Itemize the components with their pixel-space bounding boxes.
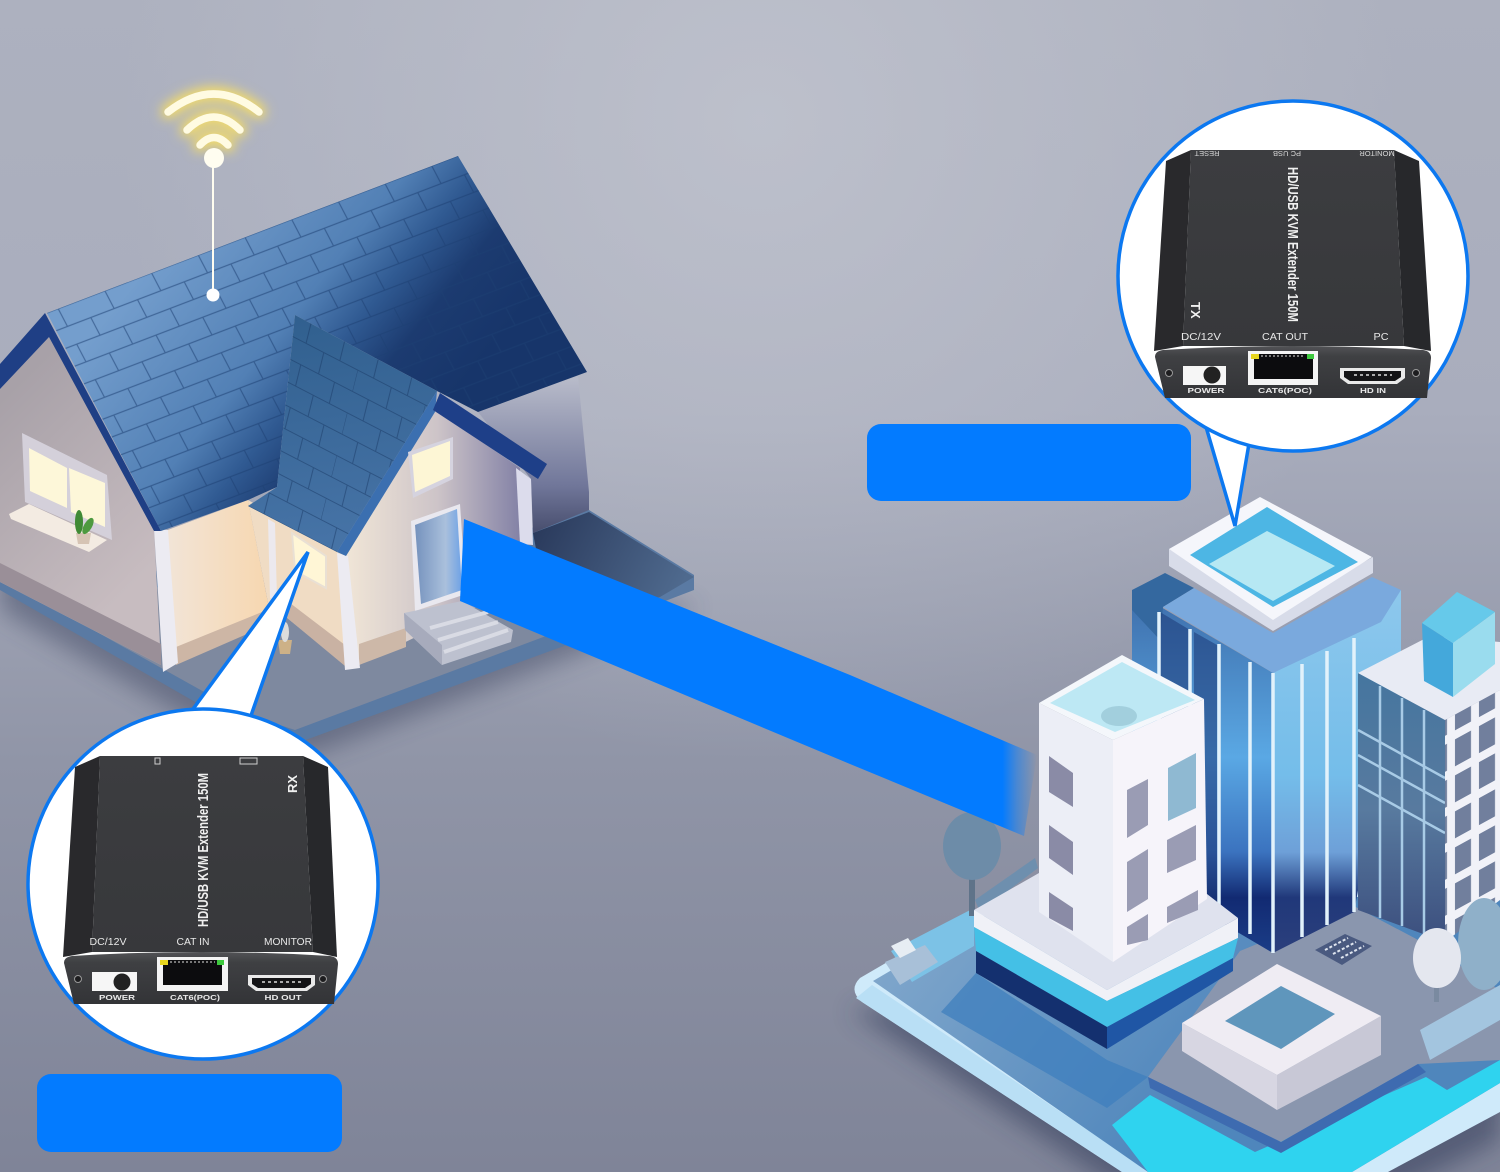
tower roof pool (1190, 507, 1358, 607)
roof inset (1050, 662, 1195, 732)
RX labels: CAT6(POC) (170, 993, 221, 1002)
RX screws (74, 976, 326, 982)
platform outer (854, 880, 1500, 1172)
blank label: office (867, 424, 1191, 501)
window sill (9, 504, 107, 552)
slab edge (0, 510, 694, 742)
blank label: home (37, 1074, 342, 1152)
gable corner post (337, 553, 360, 670)
podium cyan band (974, 927, 1238, 1027)
left bench (885, 938, 938, 985)
steps (404, 601, 513, 665)
platform inner (873, 890, 1500, 1172)
tower left top dark (1132, 573, 1194, 640)
left plinth (0, 563, 161, 665)
pavilion sides (1182, 1016, 1381, 1110)
wifi dot (204, 148, 224, 168)
TX labels: POWER (1188, 386, 1225, 395)
front plinth (176, 612, 286, 665)
TX labels: PC (1374, 332, 1388, 343)
roof disc (1101, 706, 1137, 726)
tower roof side (1169, 549, 1373, 631)
right glass building (1358, 673, 1445, 942)
wifi glow (168, 94, 259, 145)
plaza dark edge (1148, 1064, 1426, 1153)
side pad (533, 512, 694, 612)
RX labels (90, 937, 312, 1002)
RX tag: RX (285, 775, 300, 793)
RX labels: MONITOR (264, 937, 312, 948)
RX right side (303, 756, 337, 957)
antenna base (206, 288, 220, 302)
right plinth (359, 628, 406, 665)
RX title: HD/USB KVM Extender 150M (195, 773, 212, 927)
TX lens circle (1118, 101, 1468, 451)
TX labels: HD IN (1360, 386, 1386, 395)
white building left face (1039, 703, 1113, 962)
white building roof (1039, 655, 1204, 740)
office building illustration (850, 497, 1500, 1172)
TX top labels: MONITOR (1359, 149, 1395, 158)
TX left side (1154, 150, 1191, 351)
blue tree right (1458, 898, 1500, 990)
reflection pool under podium (941, 973, 1148, 1108)
rooftop cube (1422, 592, 1495, 697)
TX top labels: PC USB (1273, 149, 1301, 158)
porch window (292, 533, 326, 588)
tower right face (1273, 590, 1401, 953)
TX labels: DC/12V (1181, 332, 1221, 343)
gable roof (248, 315, 437, 552)
zoom pointer: office (1204, 420, 1253, 526)
RX labels: CAT IN (176, 937, 210, 948)
back wall (478, 376, 589, 533)
TX HDMI port (1340, 368, 1405, 384)
RX power port (92, 972, 137, 991)
RX left side (63, 756, 100, 957)
left window (22, 433, 112, 540)
TX power port (1183, 366, 1226, 385)
TX top panel (1183, 150, 1404, 346)
left roof trim (0, 313, 161, 531)
pavilion skylight (1225, 986, 1335, 1049)
slab surface (0, 540, 562, 730)
porch recess (248, 500, 346, 665)
RX lens circle (28, 709, 378, 1059)
left face windows (1049, 756, 1073, 931)
right face windows (1127, 753, 1198, 945)
tower left dark strips (1160, 612, 1217, 905)
porch plinth (286, 600, 345, 666)
tower pool inner (1209, 531, 1335, 601)
TX labels (1181, 332, 1388, 395)
upper right window (408, 437, 453, 498)
callout: TX device (1118, 101, 1468, 451)
right post (516, 468, 533, 545)
RX top icons (155, 758, 257, 764)
podium white band (974, 910, 1238, 1001)
wifi arcs (168, 94, 259, 145)
wifi signal (168, 94, 259, 302)
white tree right (1413, 928, 1461, 1002)
RX ethernet port (157, 957, 228, 991)
left cyan lawn (891, 908, 974, 982)
right eave (433, 393, 547, 479)
right building grid face (1445, 690, 1500, 942)
door (411, 504, 466, 611)
right plaza steps (1420, 985, 1500, 1060)
tower roof (1169, 497, 1372, 620)
white building right face (1113, 699, 1207, 962)
RX labels: HD OUT (264, 993, 302, 1002)
TX labels: CAT6(POC) (1258, 386, 1313, 395)
TX front (1155, 346, 1431, 398)
TX title: HD/USB KVM Extender 150M (1284, 167, 1301, 322)
platform lower edge (856, 985, 1150, 1172)
callout: RX device (28, 709, 378, 1059)
potted plant by the porch (278, 622, 292, 654)
zoom pointer: house (185, 552, 308, 727)
left wall (0, 337, 161, 665)
TX screws (1166, 370, 1420, 376)
antenna glow (208, 165, 218, 293)
RX labels: POWER (99, 993, 136, 1002)
tree left (943, 812, 1038, 916)
RX top panel (92, 756, 313, 952)
plant (75, 510, 96, 544)
RX front (64, 952, 338, 1004)
pavilion roof (1182, 964, 1381, 1075)
TX top labels (1194, 149, 1395, 158)
tower column lines (1159, 612, 1354, 953)
keyboard ornament (1315, 934, 1372, 965)
cable between house and office (460, 519, 1037, 836)
platform shadow (850, 1000, 1500, 1172)
TX ethernet port (1248, 351, 1318, 385)
podium top (974, 873, 1238, 990)
TX tag: TX (1188, 302, 1203, 319)
plaza (1148, 905, 1500, 1142)
house illustration (0, 156, 700, 755)
porch post (268, 519, 277, 600)
right wall (346, 410, 521, 665)
TX top labels: RESET (1194, 149, 1220, 158)
right building roof (1358, 636, 1500, 720)
RX labels: DC/12V (90, 937, 127, 948)
RX HDMI port (248, 975, 315, 991)
front wall left (165, 500, 270, 663)
podium dark band (976, 951, 1233, 1049)
tower cap (1163, 577, 1401, 673)
gable trim (337, 391, 437, 556)
TX right side (1394, 150, 1431, 351)
water channel (1112, 1060, 1500, 1172)
tall tower left face (1132, 590, 1273, 953)
TX labels: CAT OUT (1262, 332, 1308, 343)
main roof (47, 156, 587, 531)
house slab shadow (0, 560, 700, 755)
antenna line (212, 165, 214, 293)
left corner post (154, 529, 178, 672)
glass mullions (1358, 686, 1445, 934)
